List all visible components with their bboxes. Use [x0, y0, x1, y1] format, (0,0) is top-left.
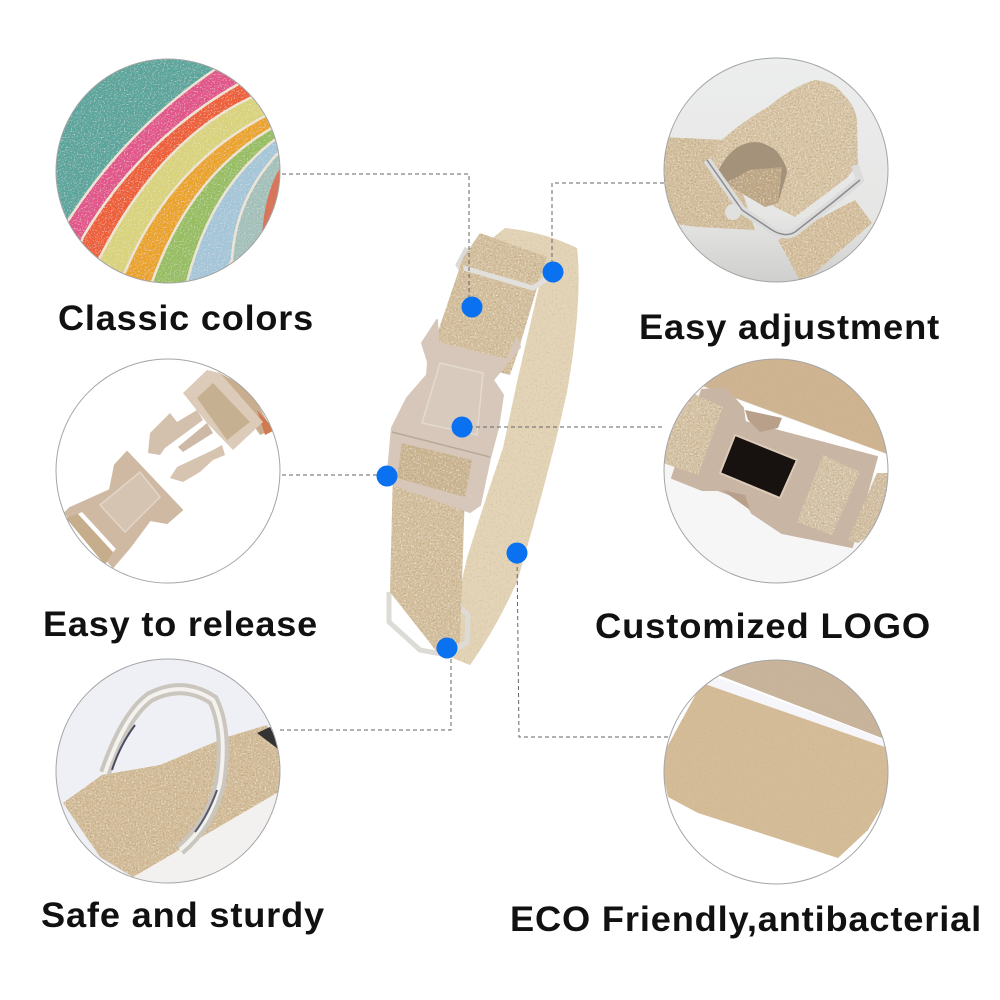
panel: classic colors — [56, 58, 280, 284]
panel: easy to release — [56, 359, 280, 583]
panel: eco friendly — [660, 650, 900, 884]
collar back strap — [445, 228, 579, 665]
connector lines — [280, 174, 668, 737]
buckle recess — [422, 363, 483, 435]
markers — [376, 262, 564, 658]
product: dog collar — [387, 228, 579, 665]
label: eco friendly: ECO Friendly,antibacterial — [510, 900, 982, 939]
label: classic colors: Classic colors — [58, 299, 314, 338]
buckle slot strap — [397, 443, 472, 497]
panel: safe and sturdy — [56, 659, 282, 884]
buckle seam — [392, 432, 490, 457]
label: customized logo: Customized LOGO — [595, 607, 931, 646]
label: easy to release: Easy to release — [43, 605, 318, 644]
label: safe and sturdy: Safe and sturdy — [41, 896, 325, 935]
label: easy adjustment: Easy adjustment — [639, 308, 940, 347]
ring slider — [458, 248, 547, 287]
panel: customized logo — [660, 350, 890, 583]
d ring — [389, 592, 468, 655]
slider bar — [464, 268, 545, 288]
panel: easy adjustment — [660, 58, 888, 284]
buckle body — [387, 320, 520, 512]
collar upper front strap — [430, 233, 547, 375]
collar lower front strap — [390, 470, 465, 652]
